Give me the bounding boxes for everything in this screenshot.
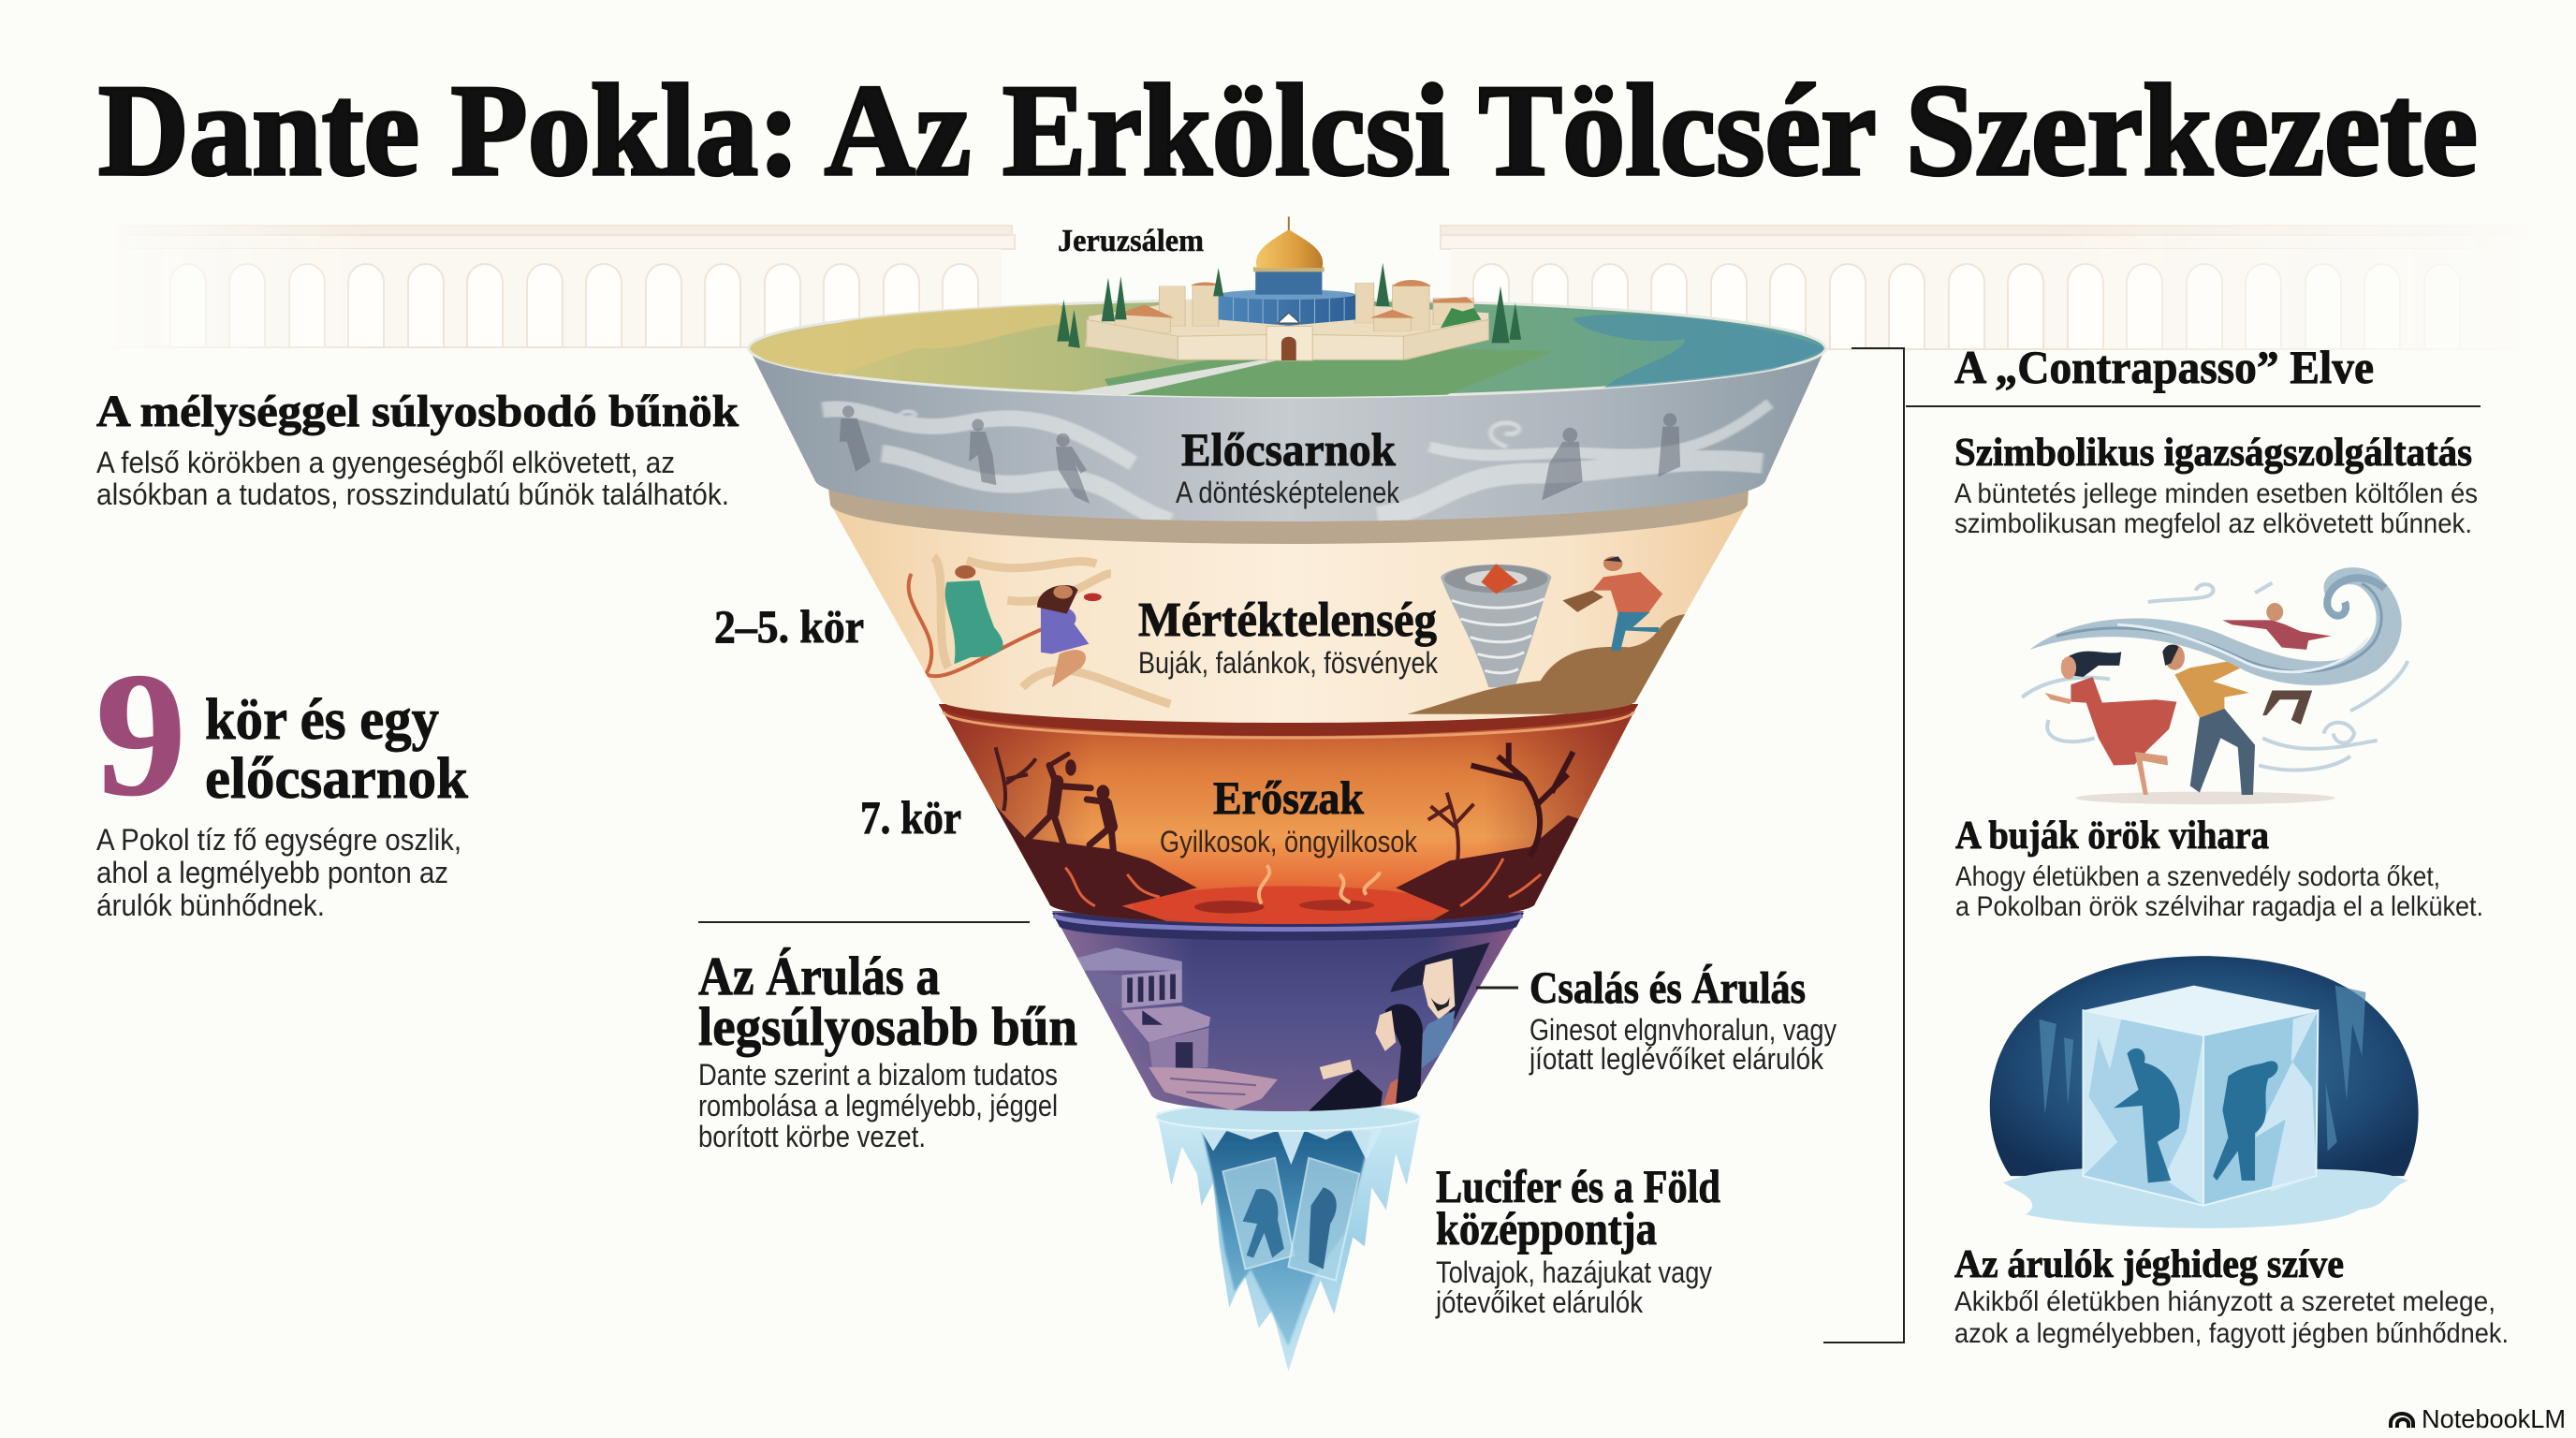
callout heading: kör és egy [205, 688, 439, 752]
text block: A buják örök vihara [1955, 814, 2483, 922]
body text: A felső körökben a gyengeségből elkövetett, az [96, 446, 675, 479]
layer: blue fraud and treachery [1052, 911, 1524, 1115]
label: Mértéktelenség: Mértéktelenség [1138, 594, 1437, 647]
big number 9: 9 [95, 637, 186, 833]
sublabel: Gyilkosok, öngyilkosok: Gyilkosok, öngyilkosok [1160, 825, 1418, 858]
masked figures [1308, 943, 1490, 1115]
sublabel: Buják, falánkok, fösvények: Buják, falánkok, fösvények [1138, 646, 1439, 680]
callout body [96, 823, 461, 922]
text block: Lucifer és a Föld középpontja [1435, 1160, 1720, 1319]
text block: Csalás és Árulás [1476, 963, 1837, 1076]
text block: Szimbolikus igazságszolgáltatás: Szimbolikus igazságszolgáltatás [1954, 432, 2472, 475]
background colonnade left [94, 226, 1015, 347]
body text: alsókban a tudatos, rosszindulatú bűnök találhatók. [96, 477, 729, 511]
limbo wisps [823, 404, 1770, 521]
label: Erőszak: Erőszak [1213, 771, 1364, 824]
text block: A buják örök vihara: A buják örök vihara [1955, 814, 2269, 858]
callout body: árulók bünhődnek. [96, 888, 325, 922]
sublabel: A döntésképtelenek: A döntésképtelenek [1176, 476, 1400, 509]
lustful figures [909, 557, 1170, 704]
text block: A buják örök vihara: Ahogy életükben a szenvedély sodorta őket, [1955, 861, 2440, 892]
label: Jeruzsálem: Jeruzsálem [1058, 224, 1204, 258]
right panel heading: A Contrapasso Elve: A „Contrapasso” Elve [1954, 341, 2374, 393]
text block: Az árulók jéghideg szíve: Akikből életükben hiányzott a szeretet melege, [1954, 1286, 2496, 1317]
tornado [1441, 564, 1552, 687]
label: Erőszak [1160, 771, 1418, 858]
layer: grey limbo [749, 348, 1825, 521]
layer: cream incontinence [830, 504, 1748, 723]
callout body: A Pokol tíz fő egységre oszlik, [96, 823, 461, 857]
text block: Az Árulás [698, 922, 1077, 1153]
ice top rim [1156, 1103, 1420, 1131]
title: Dante Pokla: Az Erkölcsi Tölcsér Szerkezete [98, 58, 2478, 203]
text block: Szimbolikus igazságszolgáltatás: A büntetés jellege minden esetben költőlen és [1954, 478, 2478, 509]
layer: brown divider band [828, 489, 1749, 544]
figure: woman in red dress [2045, 652, 2176, 795]
background colonnade right [1441, 226, 2527, 349]
text block: Csalás és Árulás: Csalás és Árulás [1530, 963, 1806, 1013]
text block: Lucifer és a Föld középpontja: középpontja [1436, 1202, 1657, 1255]
illustration: storm of the lustful [2022, 567, 2408, 804]
label: Mértéktelenség [1138, 594, 1439, 680]
text block: Az Árulás: legsúlyosabb bűn [698, 996, 1077, 1057]
label: 2–5. kör: 2–5. kör [714, 600, 864, 653]
text block: Csalás és Árulás: jíotatt leglévőíket elárulók [1529, 1042, 1824, 1076]
callout body: ahol a legmélyebb ponton az [96, 856, 448, 889]
label: 7. kör: 7. kör [860, 791, 961, 844]
right hill and trees [1396, 742, 1579, 920]
dirt mound [1407, 614, 1689, 714]
text block: Az Árulás: borított körbe vezet. [698, 1120, 926, 1153]
text block: Lucifer és a Föld középpontja: Lucifer és a Föld [1436, 1160, 1720, 1212]
illustration: frozen traitors [1990, 956, 2419, 1228]
funnel diagram [749, 216, 1825, 1372]
logo: NotebookLM: NotebookLM [2422, 1404, 2566, 1433]
icon: Jerusalem walled city [1057, 216, 1521, 360]
callout heading: előcsarnok [205, 747, 469, 811]
layer: ice centre [1156, 1103, 1420, 1372]
text block: Az Árulás: Dante szerint a bizalom tudatos [698, 1058, 1058, 1092]
left hill and fighters [977, 747, 1197, 924]
layer: red violence [939, 704, 1638, 929]
figure: man in yellow sweater [2162, 644, 2255, 795]
callout: 9 kör és egy előcsarnok [95, 637, 469, 922]
miser figure [1562, 556, 1662, 651]
text block: Lucifer és a Föld középpontja: Tolvajok, hazájukat vagy [1436, 1255, 1712, 1289]
text block: Csalás és Árulás: Ginesot elgnvhoralun, vagy [1530, 1013, 1837, 1047]
body text [96, 446, 729, 511]
bracket connector [1823, 348, 1904, 1343]
text block: Lucifer és a Föld középpontja: jótevőiket elárulók [1435, 1285, 1644, 1319]
flames [1259, 865, 1380, 903]
text block: Az árulók jéghideg szíve: azok a legmélyebben, fagyott jégben bűnhődnek. [1954, 1318, 2509, 1349]
disc top: earth surface [749, 300, 1825, 399]
text block: Az Árulás: rombolása a legmélyebb, jéggel [698, 1089, 1058, 1123]
limbo souls [840, 405, 1680, 504]
thin wind streaks [2022, 583, 2408, 770]
text block: A buják örök vihara: a Pokolban örök szélvihar ragadja el a lelküket. [1955, 891, 2483, 922]
callout heading [205, 688, 469, 811]
text block: A mélységgel súlyosbodó bűnök: A mélységgel súlyosbodó bűnök [96, 387, 739, 436]
figure: flying man in red [2222, 603, 2332, 725]
text block: Az árulók jéghideg szíve [1954, 1243, 2509, 1349]
wind ribbon [2029, 567, 2402, 685]
label: Előcsarnok: Előcsarnok [1181, 423, 1396, 476]
text block: Az árulók jéghideg szíve: Az árulók jéghideg szíve [1954, 1243, 2344, 1286]
text block: Szimbolikus igazságszolgáltatás: szimbolikusan megfelol az elkövetett bűnnek. [1954, 508, 2472, 539]
text block: Az Árulás: Az Árulás a [698, 946, 940, 1006]
ruined building [1076, 947, 1278, 1110]
lava lake [1133, 886, 1444, 926]
text block: Szimbolikus igazságszolgáltatás [1954, 432, 2478, 539]
label: Előcsarnok [1176, 423, 1400, 509]
text block: A mélységgel súlyosbodó bűnök [96, 387, 739, 511]
